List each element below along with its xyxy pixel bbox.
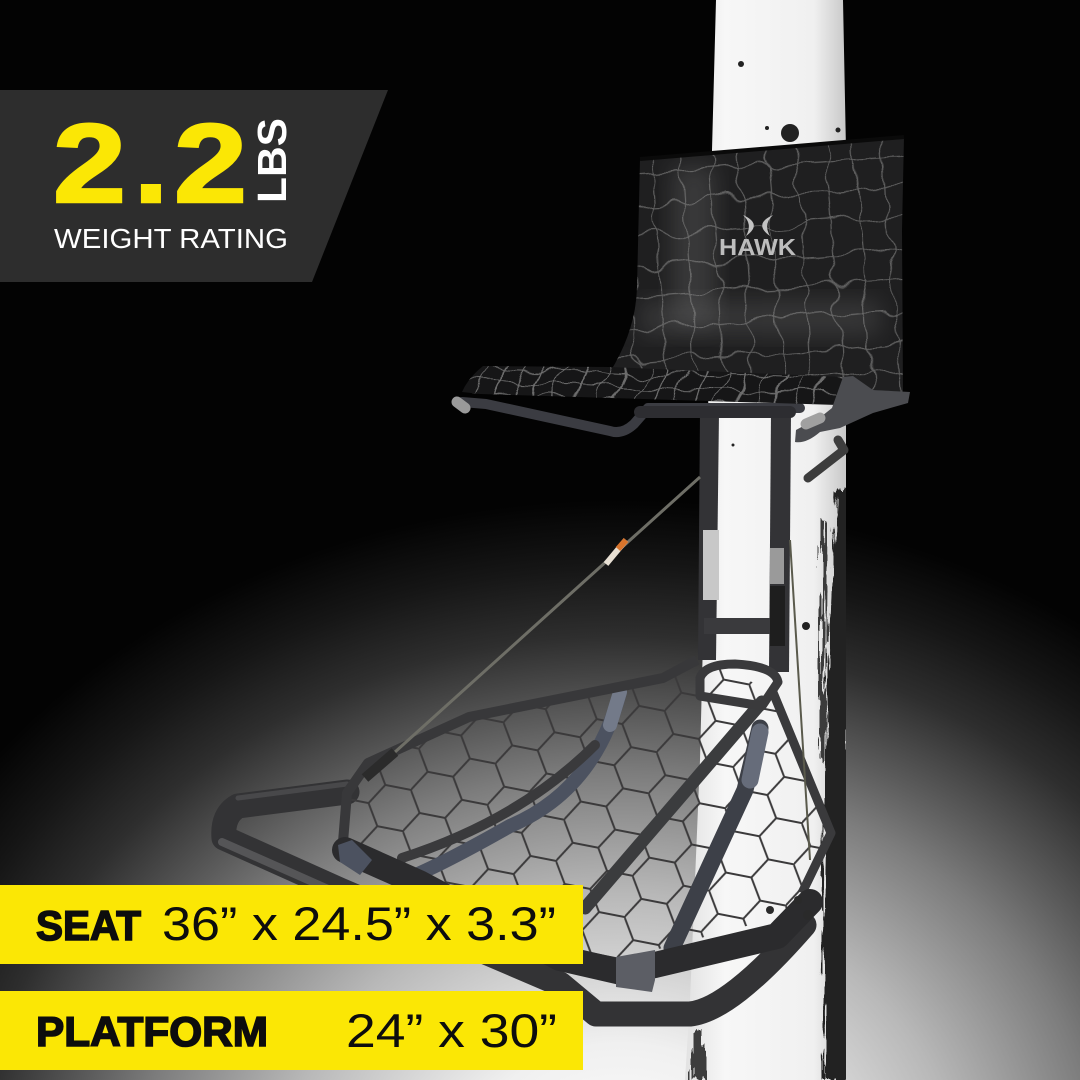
tree knots: [732, 61, 840, 630]
platform dimensions: 24” x 30”: [346, 1004, 557, 1057]
seat dimensions bar: [0, 885, 583, 964]
weight rating panel: [0, 90, 388, 282]
support cables: [365, 477, 810, 860]
tube sleeves: [616, 950, 655, 992]
platform dimensions bar: [0, 991, 583, 1070]
logo mark: [743, 215, 773, 236]
bark streaks: [692, 490, 850, 1080]
weight caption: WEIGHT RATING: [54, 223, 288, 254]
seat support frame: [457, 402, 844, 478]
tree stand illustration: [222, 120, 920, 1014]
Hawk logo: [719, 215, 796, 260]
seat back: [613, 139, 904, 392]
weight value: [53, 101, 247, 226]
seat label: SEAT: [36, 902, 141, 949]
weight value: .: [134, 101, 168, 226]
bolts: [766, 896, 813, 920]
tree trunk: [685, 0, 850, 1080]
Hawk logo: HAWK: [719, 234, 796, 260]
unit label: LBS: [249, 118, 295, 203]
platform rear step: [700, 664, 778, 706]
platform mesh: [330, 640, 850, 992]
seat dimensions: 36” x 24.5” x 3.3”: [162, 897, 556, 950]
outer platform rail: [222, 784, 804, 1014]
weight value: 2: [53, 101, 126, 226]
platform frame: [343, 660, 697, 842]
platform support straps: [402, 692, 762, 948]
weight value: 2: [174, 101, 247, 226]
right armrest: [795, 376, 910, 442]
stand column: [698, 412, 791, 672]
seat cushion: [462, 366, 843, 405]
front platform tube: [345, 850, 810, 972]
platform label: PLATFORM: [36, 1008, 268, 1055]
